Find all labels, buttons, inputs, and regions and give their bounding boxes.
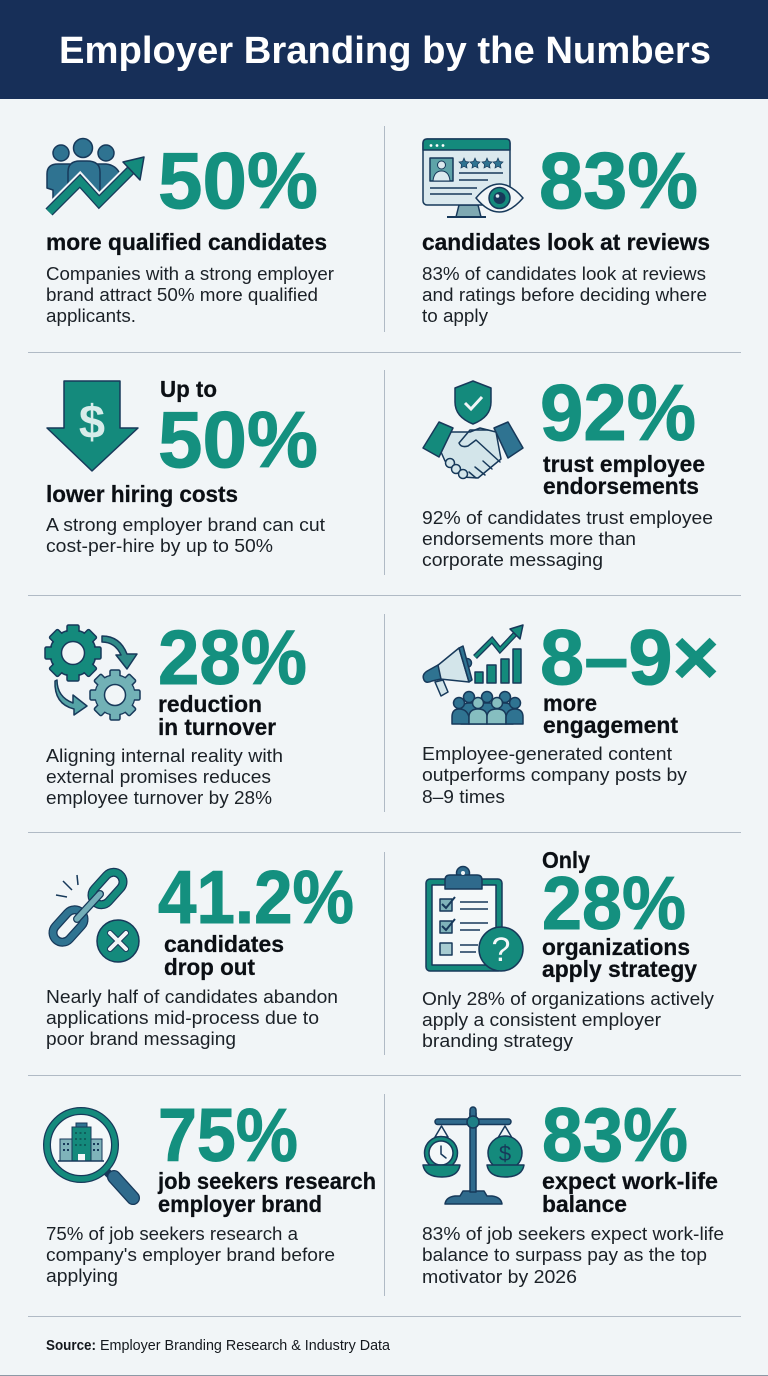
description: 83% of job seekers expect work-life — [422, 1223, 724, 1244]
panel: reduction in turnover — [45, 615, 307, 808]
description: A strong employer brand can cut — [46, 514, 325, 535]
description: 83% of candidates look at reviews — [422, 263, 706, 284]
icon: balance scale with clock and coin — [423, 1107, 524, 1204]
statistic: 28%: 28% — [542, 861, 686, 945]
heading: in turnover — [158, 714, 276, 740]
heading: apply strategy — [542, 956, 697, 982]
icon: megaphone, chart and audience — [423, 625, 523, 724]
icon: clipboard with question mark: ? — [492, 931, 510, 969]
icon: magnifier over office building — [47, 1111, 133, 1198]
heading — [158, 691, 276, 740]
description: 8–9 times — [422, 786, 505, 807]
description — [46, 263, 334, 326]
heading: expect work-life — [542, 1168, 718, 1194]
heading: trust employee — [543, 451, 705, 477]
heading — [157, 1168, 376, 1217]
description — [46, 1223, 335, 1286]
source note: Source: — [46, 1337, 96, 1354]
description — [422, 507, 713, 570]
description — [422, 743, 688, 807]
source note: Employer Branding Research & Industry Data — [100, 1337, 391, 1354]
heading: organizations — [542, 934, 690, 960]
description — [422, 1223, 724, 1287]
description: applications mid-process due to — [46, 1007, 319, 1028]
icon: down arrow with dollar sign — [47, 381, 138, 471]
panel: candidates drop out — [46, 855, 354, 1049]
heading: candidates look at reviews — [422, 229, 710, 255]
description: brand attract 50% more qualified — [46, 284, 318, 305]
icon: gears with cycle arrows — [45, 625, 140, 720]
description: company's employer brand before — [46, 1244, 335, 1265]
icon: balance scale with clock and coin: $ — [499, 1141, 511, 1166]
description: outperforms company posts by — [422, 764, 688, 785]
icon: broken chain link with X — [49, 868, 139, 962]
panel: candidates look at reviews — [422, 136, 710, 326]
panel: expect work-life balance — [422, 1093, 724, 1287]
label: only: Only — [542, 847, 590, 873]
panel: job seekers research employer brand — [46, 1093, 376, 1286]
description: Only 28% of organizations actively — [422, 988, 715, 1009]
description: corporate messaging — [422, 549, 603, 570]
heading — [543, 451, 705, 499]
panel: organizations apply strategy — [422, 847, 715, 1051]
label: up to: Up to — [160, 376, 217, 402]
description — [46, 986, 338, 1049]
statistic: 28%: 28% — [158, 615, 307, 701]
icon: handshake with shield — [423, 381, 523, 478]
statistic: 8–9×: 8–9× — [540, 613, 719, 701]
description: endorsements more than — [422, 528, 636, 549]
description — [46, 514, 325, 556]
description: 92% of candidates trust employee — [422, 507, 713, 528]
description: apply a consistent employer — [422, 1009, 661, 1030]
heading: candidates — [164, 931, 284, 957]
description: cost-per-hire by up to 50% — [46, 535, 273, 556]
icon: down arrow with dollar sign: $ — [79, 395, 105, 448]
description: motivator by 2026 — [422, 1266, 577, 1287]
statistic: 83%: 83% — [539, 136, 698, 225]
heading — [542, 1168, 718, 1217]
description: to apply — [422, 305, 489, 326]
description: applicants. — [46, 305, 136, 326]
heading: employer brand — [158, 1191, 322, 1217]
description — [422, 988, 715, 1051]
statistic: 92%: 92% — [540, 368, 696, 457]
description: branding strategy — [422, 1030, 574, 1051]
heading: more qualified candidates — [46, 229, 327, 255]
description: poor brand messaging — [46, 1028, 236, 1049]
description: 75% of job seekers research a — [46, 1223, 299, 1244]
panel: trust employee endorsements — [422, 368, 713, 570]
heading — [543, 690, 678, 738]
statistic: 75%: 75% — [158, 1093, 298, 1177]
description — [422, 263, 707, 326]
description: employee turnover by 28% — [46, 787, 272, 808]
heading: lower hiring costs — [46, 481, 238, 507]
description: Employee-generated content — [422, 743, 672, 764]
description: applying — [46, 1265, 118, 1286]
icon: clipboard with question mark — [426, 866, 523, 971]
description: Companies with a strong employer — [46, 263, 334, 284]
description: balance to surpass pay as the top — [422, 1244, 707, 1265]
heading — [542, 934, 697, 982]
heading: drop out — [164, 954, 255, 980]
icon: monitor with reviews and eye — [423, 139, 523, 217]
heading: engagement — [543, 712, 678, 738]
icon: people with rising arrow — [47, 138, 144, 212]
panel: more engagement — [422, 613, 719, 807]
description: Aligning internal reality with — [46, 745, 283, 766]
description: external promises reduces — [46, 766, 271, 787]
description: Nearly half of candidates abandon — [46, 986, 338, 1007]
panel: lower hiring costs — [46, 376, 325, 556]
statistic: 41.2%: 41.2% — [158, 855, 354, 939]
heading: endorsements — [543, 473, 699, 499]
statistic: 50%: 50% — [158, 136, 318, 225]
heading: balance — [542, 1191, 627, 1217]
heading: more — [543, 690, 597, 716]
statistic: 50%: 50% — [158, 395, 318, 484]
title banner — [0, 0, 768, 99]
heading: reduction — [158, 691, 262, 717]
description — [46, 745, 283, 808]
heading — [164, 931, 284, 980]
statistic: 83%: 83% — [542, 1093, 688, 1178]
title banner: Employer Branding by the Numbers — [59, 30, 711, 72]
description: and ratings before deciding where — [422, 284, 707, 305]
panel: more qualified candidates — [46, 136, 334, 326]
heading: job seekers research — [157, 1168, 376, 1194]
